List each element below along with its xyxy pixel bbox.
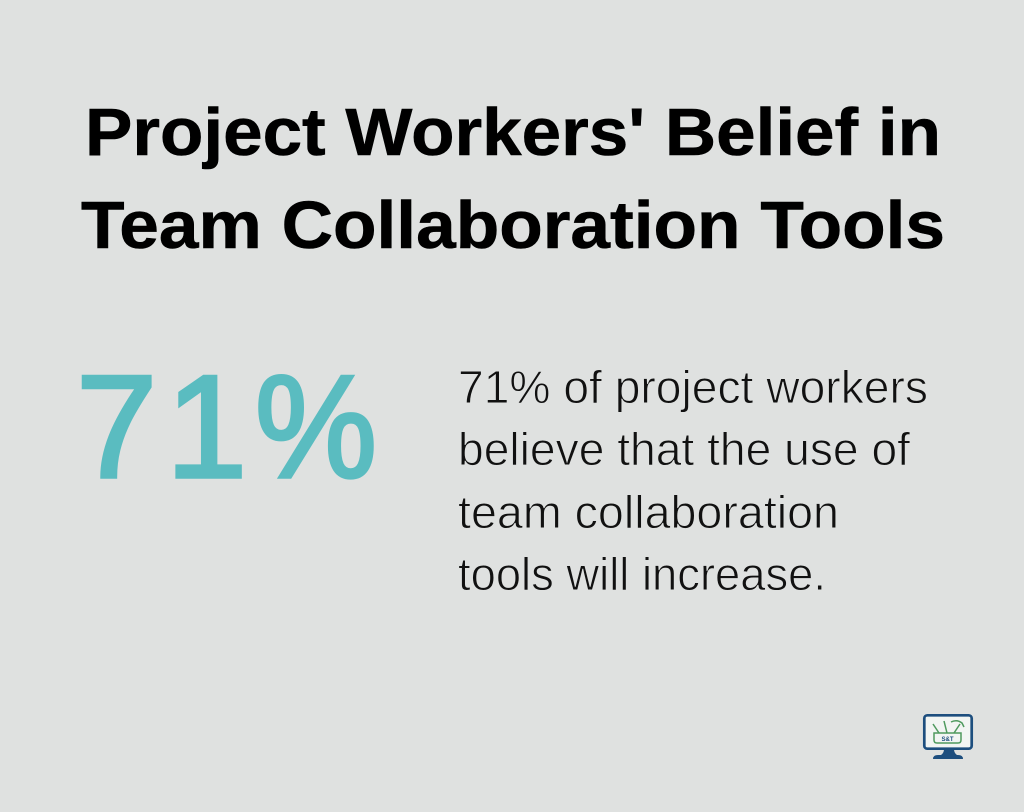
title [81, 95, 945, 263]
description text: 71% of project workers [458, 361, 928, 413]
title: Team Collaboration Tools [81, 188, 945, 263]
big statistic: 71%: % [255, 345, 377, 508]
big statistic: 71%: 1 [166, 345, 247, 508]
description text: tools will increase. [458, 548, 826, 600]
logo label: S&T [942, 737, 954, 743]
toolbox [933, 721, 964, 743]
icon: monitor with toolbox logo [924, 715, 972, 759]
title: Project Workers' Belief in [85, 95, 941, 170]
big statistic: 71%: 7 [76, 345, 157, 508]
description text: believe that the use of [458, 423, 910, 475]
description text [458, 361, 928, 600]
description text: team collaboration [458, 486, 839, 538]
